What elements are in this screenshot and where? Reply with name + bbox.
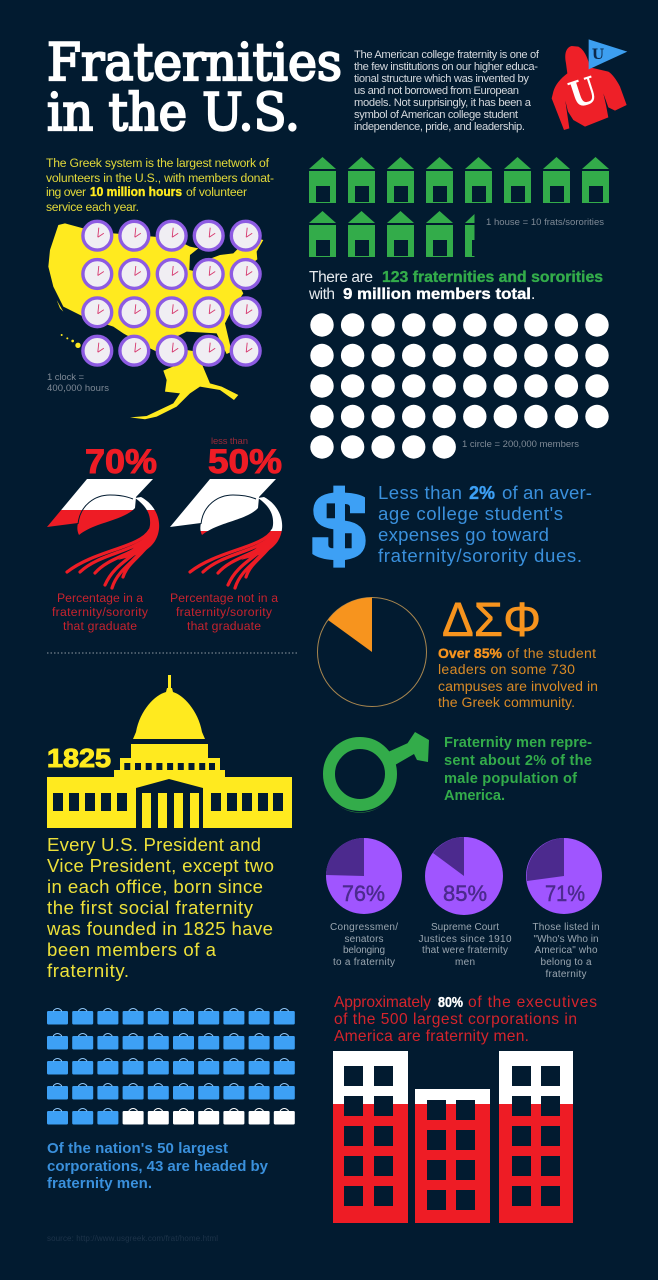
intro text block: tional structure which was invented by <box>354 73 529 85</box>
intro text block: the few institutions on our higher educa- <box>354 61 538 73</box>
note: less than: less than <box>211 436 248 447</box>
pie captions: America" who <box>534 945 598 956</box>
pie: 76% <box>326 838 402 914</box>
Greek letters: ΔΣΦ <box>442 594 541 647</box>
pie: 71%: 71% <box>545 881 585 906</box>
fraternities count text: . <box>531 286 535 303</box>
capitol building <box>47 675 292 828</box>
presidents text <box>46 834 274 981</box>
executives text: of the 500 largest corporations in <box>334 1011 577 1028</box>
male population text: America. <box>444 788 505 804</box>
executives text: of the executives <box>468 994 597 1011</box>
pie: student leaders 85% <box>318 598 426 706</box>
label: 70% <box>52 591 149 633</box>
pie captions: senators <box>344 934 384 945</box>
fraternities count text: There are <box>309 269 373 286</box>
icon: red hoodie with pennant <box>552 39 627 130</box>
stat: 50%: 50% <box>208 443 282 481</box>
intro text block <box>354 49 540 133</box>
fraternities count text: 9 million members total <box>343 286 531 303</box>
male population text: sent about 2% of the <box>444 753 592 769</box>
executives text: America are fraternity men. <box>334 1028 529 1045</box>
fraternities count text <box>308 269 603 303</box>
building 3 <box>499 1051 573 1223</box>
dues text: age college student's <box>378 503 563 524</box>
graduation caps chart <box>47 436 282 633</box>
fraternities count text: with <box>308 286 335 303</box>
year 1825: 1825 <box>47 743 111 773</box>
intro text block: models. Not surprisingly, it has been a <box>354 97 532 109</box>
map of the U.S. with Alaska <box>48 223 263 419</box>
presidents text: Every U.S. President and <box>47 834 261 855</box>
presidents text: was founded in 1825 have <box>46 918 273 939</box>
title: Fraternities <box>47 34 342 93</box>
icon: male symbol <box>329 732 429 813</box>
volunteer text: ing over <box>46 185 86 199</box>
label: 50%: fraternity/sorority <box>176 605 273 619</box>
dues text: fraternity/sorority dues. <box>378 545 582 566</box>
pie captions: fraternity <box>546 969 586 980</box>
executives text: Approximately <box>334 994 431 1011</box>
dues text: expenses go toward <box>378 524 549 545</box>
icon: graduation cap 70% <box>47 479 159 588</box>
pie captions: Congressmen/ <box>330 922 398 933</box>
pie captions: Those listed in <box>532 922 600 933</box>
volunteer text: 10 million hours <box>90 185 182 199</box>
icon: red hoodie with pennant: U <box>592 47 604 63</box>
pie: 71% <box>526 838 602 914</box>
volunteer text: service each year. <box>46 200 139 214</box>
intro text block: The American college fraternity is one of <box>354 49 540 61</box>
label: 50%: that graduate <box>187 619 261 633</box>
title <box>47 34 342 143</box>
pie: 76%: 76% <box>342 881 385 906</box>
pie captions: belonging <box>343 945 385 956</box>
icon: graduation cap 50% <box>170 479 282 588</box>
dues text <box>378 482 592 566</box>
pie captions: Justices since 1910 <box>418 934 512 945</box>
title: in the U.S. <box>47 84 300 143</box>
intro text block: symbol of American college student <box>354 109 519 121</box>
student leaders text: leaders on some 730 <box>438 661 575 677</box>
intro text block: us and not borrowed from European <box>354 85 519 97</box>
dues text: Less than <box>378 482 462 503</box>
volunteer text: of volunteer <box>186 185 247 199</box>
source: source: http://www.usgreek.com/frat/home.html <box>47 1234 218 1243</box>
fraternities count text: 123 fraternities and sororities <box>382 269 603 286</box>
male population text: Fraternity men repre- <box>444 735 592 751</box>
presidents text: Vice President, except two <box>47 855 274 876</box>
icon: red hoodie with pennant: U <box>564 68 602 117</box>
pie captions: belong to a <box>540 957 592 968</box>
pie: 85%: 85% <box>443 881 487 906</box>
intro text block: independence, pride, and leadership. <box>354 121 525 133</box>
pie captions: to a fraternity <box>333 957 395 968</box>
pie captions <box>330 922 600 980</box>
pie captions: that were fraternity <box>422 945 508 956</box>
presidents text: fraternity. <box>47 960 129 981</box>
pie captions: Supreme Court <box>431 922 499 933</box>
building 2 <box>415 1089 490 1223</box>
label: 50% <box>170 591 278 633</box>
pie: 85% <box>425 837 503 915</box>
student leaders text: of the student <box>507 645 596 661</box>
label: 70%: Percentage in a <box>57 591 143 605</box>
pie captions: men <box>455 957 475 968</box>
male population text <box>444 735 592 804</box>
clock legend: 400,000 hours <box>47 383 109 394</box>
student leaders text: Over 85% <box>438 645 503 661</box>
building 1 <box>333 1051 408 1223</box>
volunteer text: The Greek system is the largest network of <box>46 156 270 170</box>
presidents text: the first social fraternity <box>47 897 254 918</box>
clock legend: 1 clock = <box>47 372 84 383</box>
purple pie charts <box>326 837 602 915</box>
executives text: 80% <box>438 994 463 1011</box>
executives text <box>334 994 597 1045</box>
corporations text: corporations, 43 are headed by <box>47 1158 269 1175</box>
corporations text: fraternity men. <box>47 1175 152 1192</box>
briefcases pictogram <box>47 1008 295 1124</box>
student leaders text: the Greek community. <box>438 694 575 710</box>
label: 50%: Percentage not in a <box>170 591 278 605</box>
house legend: 1 house = 10 frats/sororities <box>486 217 604 228</box>
corporations text <box>47 1140 269 1192</box>
members circles pictogram <box>310 313 609 459</box>
dues text: 2% <box>469 483 495 503</box>
icon: dollar sign <box>312 486 366 568</box>
stat: 70%: 70% <box>85 443 157 481</box>
circle legend: 1 circle = 200,000 members <box>462 439 579 450</box>
student leaders text <box>438 645 598 710</box>
buildings chart <box>333 1051 573 1223</box>
student leaders text: campuses are involved in <box>438 678 598 694</box>
clock legend <box>47 372 109 394</box>
volunteer text: volunteers in the U.S., with members donat- <box>46 171 274 185</box>
houses pictogram <box>309 157 609 257</box>
male population text: male population of <box>444 771 577 787</box>
clocks pictogram <box>83 221 260 365</box>
corporations text: Of the nation's 50 largest <box>47 1140 228 1157</box>
presidents text: in each office, born since <box>47 876 263 897</box>
presidents text: been members of a <box>47 939 217 960</box>
dues text: of an aver- <box>502 482 592 503</box>
label: 70%: that graduate <box>63 619 137 633</box>
volunteer text <box>46 156 274 214</box>
pie captions: "Who's Who in <box>534 934 598 945</box>
label: 70%: fraternity/sorority <box>52 605 149 619</box>
